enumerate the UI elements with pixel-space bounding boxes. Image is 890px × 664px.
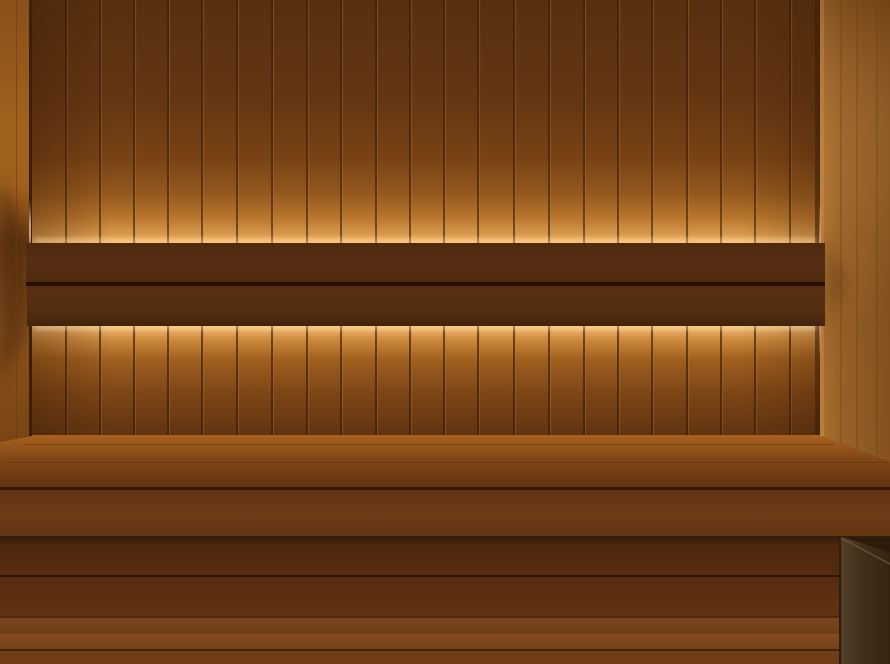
bench: seat top bbox=[0, 435, 890, 488]
backrest: upper beam bbox=[26, 243, 825, 282]
backrest: gap bbox=[26, 282, 825, 286]
backrest: lower beam bbox=[27, 286, 825, 326]
panel: upper back wall planks bbox=[32, 0, 820, 243]
heater box bbox=[839, 537, 890, 664]
panel: right side wall bbox=[820, 0, 890, 462]
lower bench: third slat bbox=[0, 616, 840, 664]
lower bench: second slat bbox=[0, 575, 840, 616]
panel: left side wall bbox=[0, 0, 32, 442]
lower bench: first slat bbox=[0, 536, 840, 575]
glow: LED light strip bbox=[29, 200, 821, 360]
bench: front face bbox=[0, 487, 890, 536]
panel: lower back wall planks bbox=[32, 326, 820, 436]
